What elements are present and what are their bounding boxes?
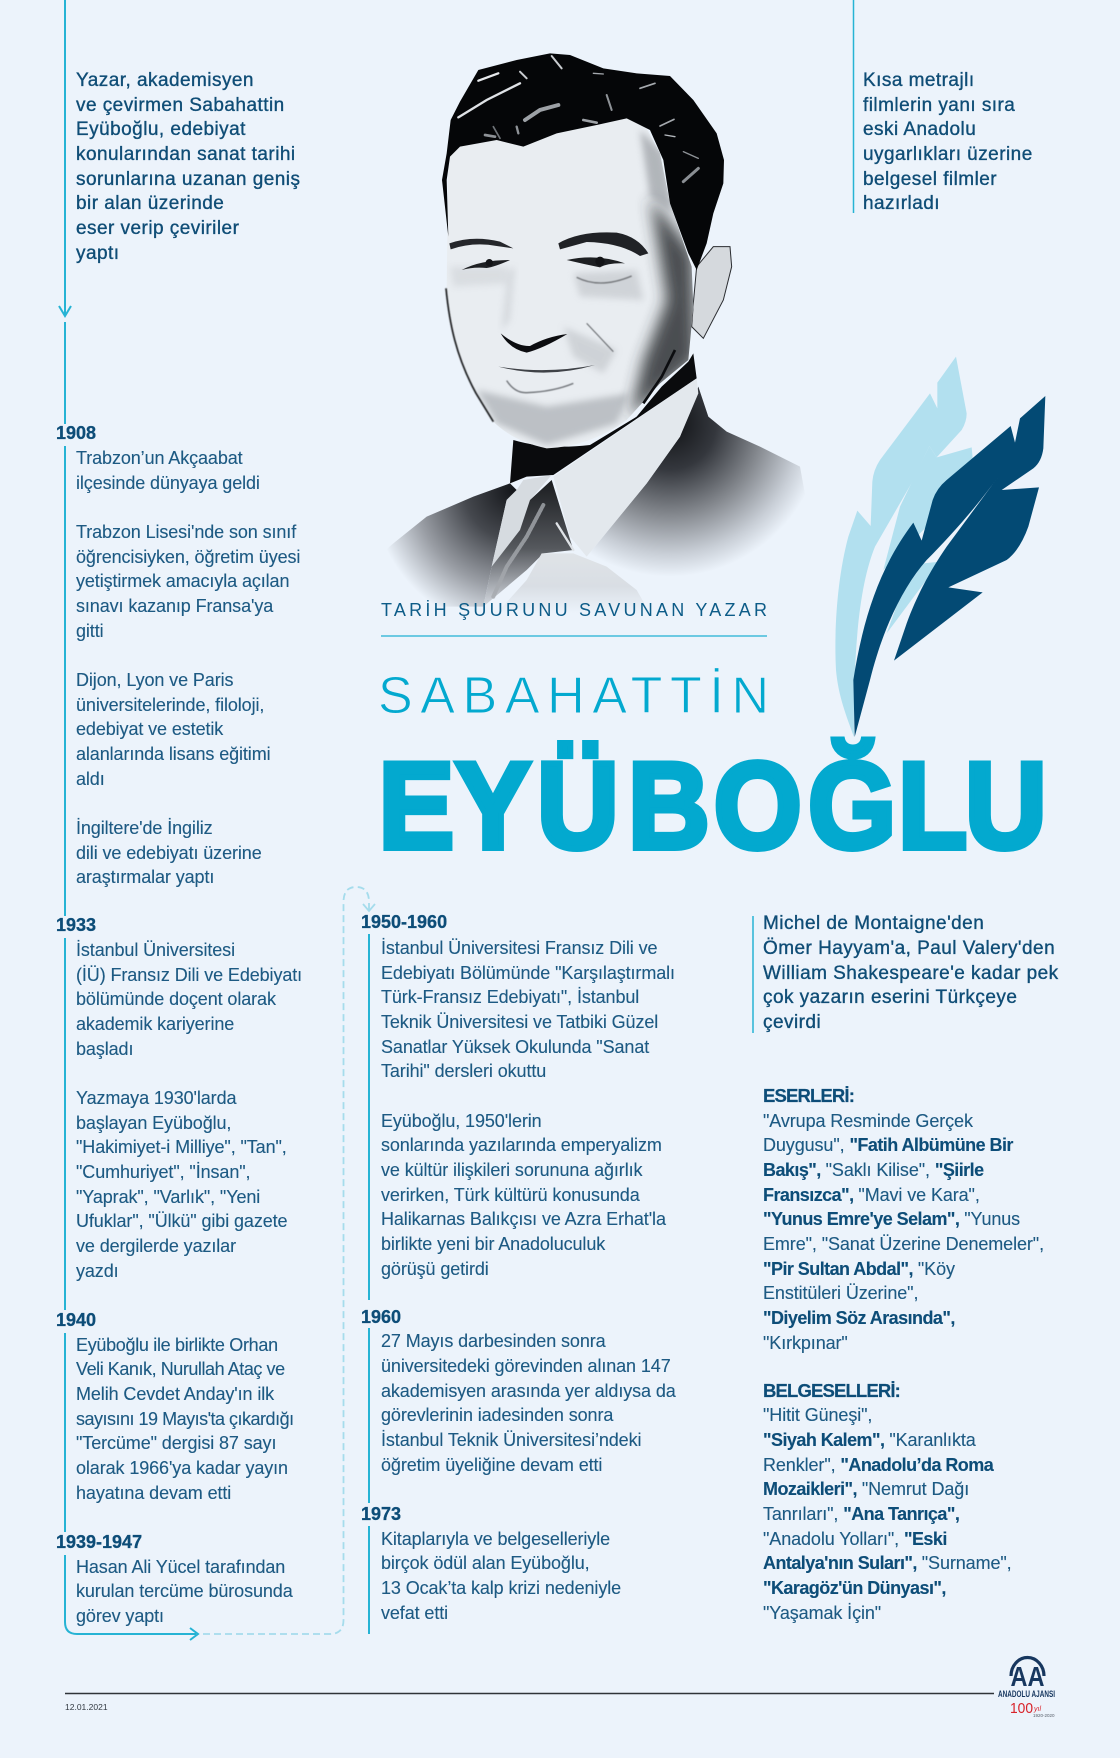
documentaries list: Tanrıları", "Ana Tanrıça",	[763, 1504, 959, 1524]
1933 entry	[56, 915, 302, 1281]
collar left	[492, 475, 552, 567]
translations callout: William Shakespeare'e kadar pek	[763, 963, 1059, 984]
works list: Enstitüleri Üzerine",	[763, 1283, 918, 1303]
face	[447, 118, 693, 448]
1940 entry: 1940	[56, 1310, 96, 1330]
1960 entry: akademisyen arasında yer aldıysa da	[381, 1381, 677, 1401]
1933 entry: "Yaprak", "Varlık", "Yeni	[76, 1187, 260, 1207]
translations callout	[753, 913, 1059, 1033]
documentaries list: Antalya'nın Suları", "Surname",	[763, 1553, 1012, 1573]
1960 entry: 27 Mayıs darbesinden sonra	[381, 1331, 607, 1351]
tagline: TARİH ŞUURUNU SAVUNAN YAZAR	[381, 600, 767, 620]
intro text right: eski Anadolu	[863, 119, 976, 140]
nose	[501, 333, 567, 353]
jaw line	[446, 288, 493, 422]
1950-1960 entry: Halikarnas Balıkçısı ve Azra Erhat'la	[381, 1209, 667, 1229]
1933 entry: İstanbul Üniversitesi	[76, 940, 235, 960]
1950-1960 entry: Sanatlar Yüksek Okulunda "Sanat	[381, 1037, 649, 1057]
translations callout: Michel de Montaigne'den	[763, 913, 984, 934]
1950-1960 entry: Eyüboğlu, 1950'lerin	[381, 1111, 542, 1131]
1950-1960 entry	[361, 912, 675, 1279]
light feather left vane	[835, 357, 967, 737]
ear	[692, 247, 732, 338]
1939-1947 entry: Hasan Ali Yücel tarafından	[76, 1557, 285, 1577]
1908 entry: üniversitelerinde, filoloji,	[76, 695, 264, 715]
works list: "Avrupa Resminde Gerçek	[763, 1111, 974, 1131]
1908 entry: Dijon, Lyon ve Paris	[76, 670, 234, 690]
logo: Anadolu Ajansi	[998, 1658, 1055, 1718]
intro text left: Yazar, akademisyen	[76, 70, 254, 91]
1940 entry: "Tercüme" dergisi 87 sayı	[76, 1433, 276, 1453]
1940 entry: Veli Kanık, Nurullah Ataç ve	[76, 1359, 285, 1379]
1960 entry: öğretim üyeliğine devam etti	[381, 1455, 602, 1475]
logo: Anadolu Ajansi: ANADOLU AJANSI	[998, 1689, 1055, 1699]
1940 entry: hayatına devam etti	[76, 1483, 231, 1503]
intro text left: ve çevirmen Sabahattin	[76, 95, 285, 116]
documentaries list: Mozaikleri", "Nemrut Dağı	[763, 1479, 969, 1499]
1908 entry: Trabzon’un Akçaabat	[76, 448, 243, 468]
dashed connector arrow	[203, 887, 375, 1634]
portrait photo	[367, 53, 813, 613]
intro text left: Eyüboğlu, edebiyat	[76, 119, 246, 140]
documentaries list: BELGESELLERİ:	[763, 1380, 900, 1401]
1939-1947 entry: 1939-1947	[56, 1532, 142, 1552]
1960 entry	[361, 1307, 677, 1475]
left column timeline text	[56, 423, 302, 1626]
1939-1947 entry	[56, 1532, 294, 1626]
1950-1960 entry: Tarihi" dersleri okuttu	[381, 1061, 546, 1081]
1940 entry	[56, 1310, 294, 1503]
works list: "Diyelim Söz Arasında",	[763, 1308, 955, 1328]
documentaries list: "Yaşamak İçin"	[763, 1603, 881, 1623]
intro text left: eser verip çeviriler	[76, 218, 240, 239]
1950-1960 entry: Edebiyatı Bölümünde "Karşılaştırmalı	[381, 963, 675, 983]
intro text left: bir alan üzerinde	[76, 193, 224, 214]
middle column timeline text	[361, 912, 677, 1623]
collar right	[553, 378, 698, 557]
1933 entry: (İÜ) Fransız Dili ve Edebiyatı	[76, 965, 302, 985]
light feather right vane	[883, 446, 973, 570]
1940 entry: Melih Cevdet Anday'ın ilk	[76, 1384, 275, 1404]
1960 entry: görevlerinin iadesinden sonra	[381, 1405, 614, 1425]
1908 entry: sınavı kazanıp Fransa'ya	[76, 596, 274, 616]
left timeline line	[65, 322, 198, 1640]
1950-1960 entry: birlikte yeni bir Anadoluculuk	[381, 1234, 606, 1254]
works list: "Kırkpınar"	[763, 1333, 848, 1353]
tie pattern	[493, 505, 573, 597]
1940 entry: sayısını 19 Mayıs'ta çıkardığı	[76, 1409, 294, 1429]
intro text left	[76, 70, 300, 264]
intro text right: belgesel filmler	[863, 169, 997, 190]
translations callout: Ömer Hayyam'a, Paul Valery'den	[763, 938, 1055, 959]
eyes	[462, 260, 510, 270]
1908 entry: alanlarında lisans eğitimi	[76, 744, 271, 764]
1908 entry: Trabzon Lisesi'nde son sınıf	[76, 522, 297, 542]
logo: Anadolu Ajansi: 100	[1010, 1700, 1033, 1717]
works list: Fransızca", "Mavi ve Kara",	[763, 1185, 980, 1205]
intro text right: filmlerin yanı sıra	[863, 95, 1015, 116]
1950-1960 entry: sonlarında yazılarında emperyalizm	[381, 1135, 662, 1155]
works list: "Yunus Emre'ye Selam", "Yunus	[763, 1209, 1020, 1229]
decorative feather quill	[835, 357, 1045, 737]
1950-1960 entry: İstanbul Üniversitesi Fransız Dili ve	[381, 938, 657, 958]
documentaries list: "Hitit Güneşi",	[763, 1405, 872, 1425]
1908 entry: dili ve edebiyatı üzerine	[76, 843, 262, 863]
1908 entry: yetiştirmek amacıyla açılan	[76, 571, 289, 591]
translations callout: çok yazarın eserini Türkçeye	[763, 987, 1017, 1008]
timeline arrow: left intro	[59, 0, 71, 316]
1950-1960 entry: verirken, Türk kültürü konusunda	[381, 1185, 641, 1205]
1950-1960 entry: ve kültür ilişkileri sorununa ağırlık	[381, 1160, 644, 1180]
intro text left: sorunlarına uzanan geniş	[76, 169, 300, 190]
documentaries list	[763, 1380, 1012, 1623]
documentaries list: Renkler", "Anadolu’da Roma	[763, 1455, 995, 1475]
neck shadow	[510, 353, 697, 483]
1908 entry: gitti	[76, 621, 104, 641]
intro text right	[854, 0, 1033, 214]
light feather lower piece	[887, 562, 940, 633]
1908 entry	[56, 423, 300, 887]
works list: Bakış", "Saklı Kilise", "Şiirle	[763, 1160, 984, 1180]
intro text left: yaptı	[76, 243, 120, 264]
1908 entry: 1908	[56, 423, 96, 443]
1973 entry	[361, 1504, 621, 1623]
footer rule and date: 12.01.2021	[65, 1702, 108, 1712]
1960 entry: 1960	[361, 1307, 401, 1327]
1933 entry: başladı	[76, 1039, 133, 1059]
works list: Emre", "Sanat Üzerine Denemeler",	[763, 1234, 1044, 1254]
face shading	[450, 130, 697, 445]
1908 entry: araştırmalar yaptı	[76, 867, 214, 887]
1908 entry: aldı	[76, 769, 105, 789]
mouth	[498, 365, 595, 373]
hair	[442, 53, 724, 270]
intro text right: hazırladı	[863, 193, 940, 214]
hand	[497, 553, 650, 613]
documentaries list: "Karagöz'ün Dünyası",	[763, 1578, 946, 1598]
works list: ESERLERİ:	[763, 1085, 854, 1106]
1908 entry: öğrencisiyken, öğretim üyesi	[76, 547, 300, 567]
1933 entry: Ufuklar", "Ülkü" gibi gazete	[76, 1211, 288, 1231]
1940 entry: olarak 1966'ya kadar yayın	[76, 1458, 288, 1478]
dark feather	[853, 396, 1045, 737]
1939-1947 entry: kurulan tercüme bürosunda	[76, 1581, 294, 1601]
1950-1960 entry: görüşü getirdi	[381, 1259, 489, 1279]
1933 entry: akademik kariyerine	[76, 1014, 234, 1034]
logo: Anadolu Ajansi: 1920-2020	[1033, 1713, 1055, 1718]
logo: Anadolu Ajansi: yıl	[1033, 1706, 1041, 1713]
suit left	[367, 483, 517, 607]
1973 entry: vefat etti	[381, 1603, 448, 1623]
works list	[763, 1085, 1044, 1353]
1908 entry: ilçesinde dünyaya geldi	[76, 473, 260, 493]
works list: "Pir Sultan Abdal", "Köy	[763, 1259, 955, 1279]
1933 entry: 1933	[56, 915, 96, 935]
eyebrows	[449, 239, 513, 249]
1940 entry: Eyüboğlu ile birlikte Orhan	[76, 1335, 278, 1355]
documentaries list: "Siyah Kalem", "Karanlıkta	[763, 1430, 977, 1450]
translations callout: çevirdi	[763, 1012, 821, 1033]
1933 entry: yazdı	[76, 1261, 119, 1281]
intro text right: Kısa metrajlı	[863, 70, 975, 91]
suit right	[587, 387, 813, 607]
intro text left: konularından sanat tarihi	[76, 144, 296, 165]
logo: Anadolu Ajansi: AA	[1010, 1661, 1044, 1692]
hair highlights	[458, 56, 698, 182]
1973 entry: 1973	[361, 1504, 401, 1524]
1950-1960 entry: Türk-Fransız Edebiyatı", İstanbul	[381, 987, 639, 1007]
1973 entry: Kitaplarıyla ve belgeselleriyle	[381, 1529, 610, 1549]
1950-1960 entry: 1950-1960	[361, 912, 447, 932]
1933 entry: "Hakimiyet-i Milliye", "Tan",	[76, 1137, 287, 1157]
1933 entry: "Cumhuriyet", "İnsan",	[76, 1162, 250, 1182]
1933 entry: Yazmaya 1930'larda	[76, 1088, 237, 1108]
1933 entry: ve dergilerde yazılar	[76, 1236, 236, 1256]
1933 entry: bölümünde doçent olarak	[76, 989, 277, 1009]
title first name: SABAHATTİN	[378, 667, 769, 725]
tie	[483, 480, 573, 607]
1960 entry: İstanbul Teknik Üniversitesi’ndeki	[381, 1430, 641, 1450]
1908 entry: edebiyat ve estetik	[76, 719, 224, 739]
intro text right: uygarlıkları üzerine	[863, 144, 1033, 165]
middle timeline line	[368, 934, 370, 1634]
1933 entry: başlayan Eyüboğlu,	[76, 1113, 231, 1133]
1939-1947 entry: görev yaptı	[76, 1606, 164, 1626]
1950-1960 entry: Teknik Üniversitesi ve Tatbiki Güzel	[381, 1012, 658, 1032]
documentaries list: "Anadolu Yolları", "Eski	[763, 1529, 947, 1549]
1908 entry: İngiltere'de İngiliz	[76, 818, 213, 838]
1973 entry: 13 Ocak’ta kalp krizi nedeniyle	[381, 1578, 621, 1598]
1973 entry: birçok ödül alan Eyüboğlu,	[381, 1553, 590, 1573]
works list: Duygusu", "Fatih Albümüne Bir	[763, 1135, 1013, 1155]
1960 entry: üniversitedeki görevinden alınan 147	[381, 1356, 671, 1376]
title surname: EYÜBOĞLU	[379, 738, 1047, 875]
